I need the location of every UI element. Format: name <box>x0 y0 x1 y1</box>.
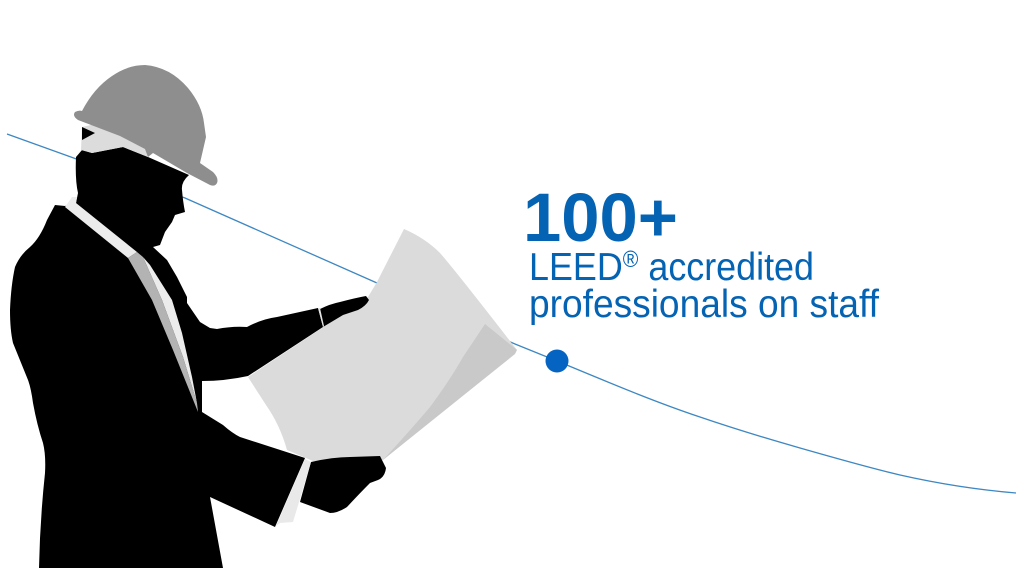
curved timeline line <box>7 134 1016 493</box>
label: LEED accredited professionals on staff: ® <box>623 246 638 272</box>
label: LEED accredited professionals on staff: professionals on staff <box>529 283 879 326</box>
upper shirt cuff <box>318 308 324 327</box>
necktie <box>128 252 198 412</box>
shirt front <box>143 257 197 403</box>
suit body and head <box>10 147 323 568</box>
hard hat band <box>81 124 150 157</box>
hair wedge under hat <box>82 127 95 140</box>
document: unfolded plan sheet <box>248 229 517 461</box>
silhouette: construction professional reading plans <box>10 65 517 568</box>
lower hand <box>300 456 386 513</box>
shirt collar <box>65 197 137 258</box>
lower shirt cuff <box>276 459 311 526</box>
statistic: 100+: 100+ <box>523 179 678 256</box>
hard hat <box>74 65 218 186</box>
upper hand <box>320 296 369 327</box>
timeline dot <box>546 350 568 372</box>
label: LEED accredited professionals on staff <box>529 246 879 326</box>
label: LEED accredited professionals on staff: accredited <box>638 246 814 289</box>
label: LEED accredited professionals on staff: LEED <box>529 246 631 289</box>
